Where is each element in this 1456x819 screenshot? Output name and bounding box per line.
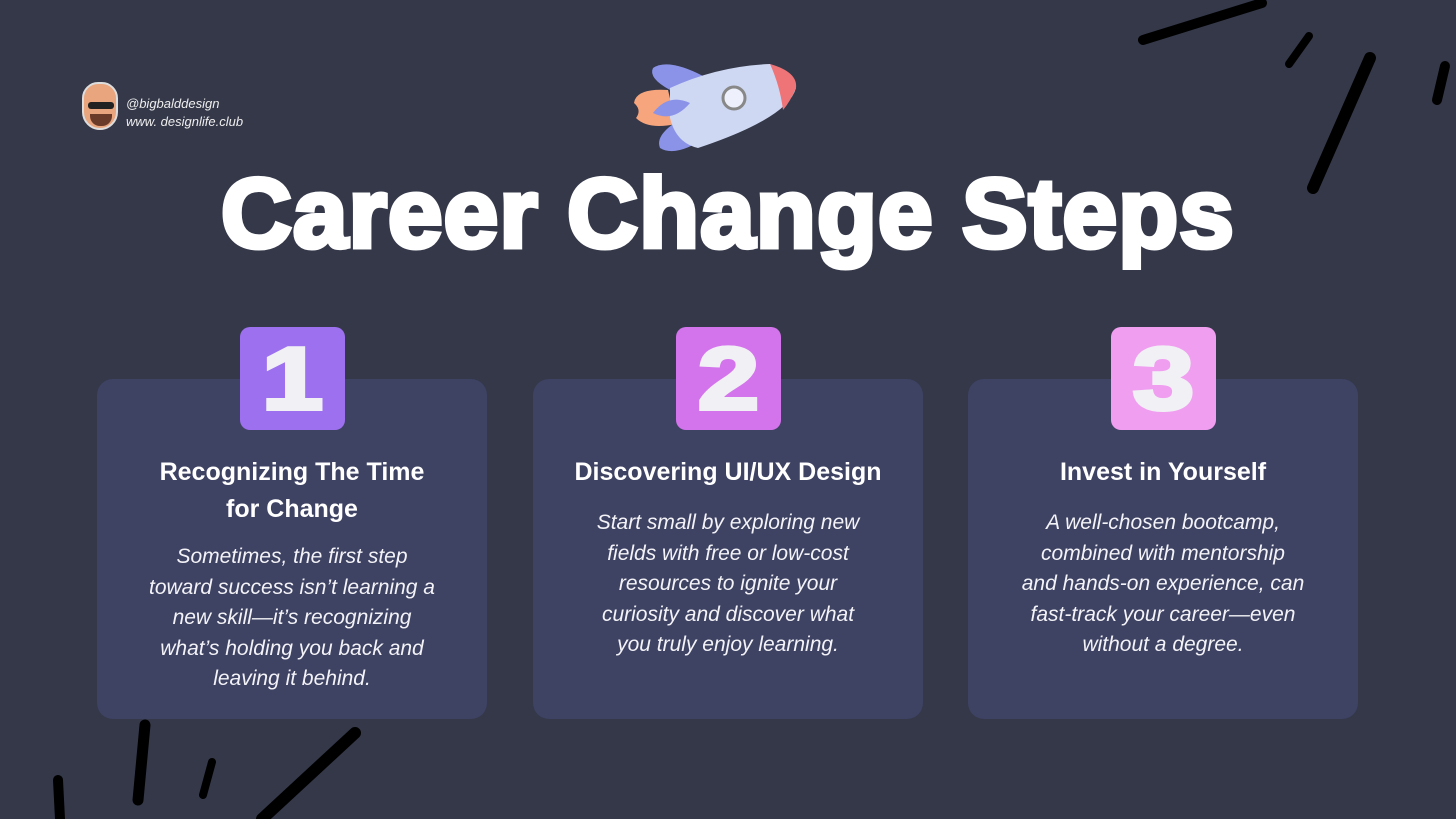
panel: step 3: A well-chosen bootcamp,: [1046, 511, 1280, 534]
panel: step 3: [968, 379, 1358, 719]
panel: step 1: toward success isn’t learning a: [149, 576, 435, 598]
icon: avatar: [82, 82, 118, 130]
title: Career Change Steps: [221, 158, 1235, 268]
panel: step 1: [97, 379, 487, 719]
badge 3: [1111, 327, 1216, 430]
panel: step 1: leaving it behind.: [213, 667, 371, 690]
badge 3: 3: [1133, 329, 1194, 428]
panel: step 3: without a degree.: [1082, 633, 1244, 656]
panel: step 1: Recognizing The Time: [160, 458, 424, 486]
badge 2: [676, 327, 781, 430]
author text: www. designlife.club: [126, 114, 243, 129]
panel: step 2: you truly enjoy learning.: [617, 633, 839, 656]
panel: step 3: combined with mentorship: [1041, 542, 1285, 564]
panel: step 1: new skill—it’s recognizing: [173, 606, 411, 629]
author text: @bigbalddesign: [126, 96, 219, 111]
panel: step 3: Invest in Yourself: [1060, 458, 1266, 486]
panel: step 2: [533, 379, 923, 719]
badge 1: [240, 327, 345, 430]
panel: step 2: Start small by exploring new: [597, 511, 859, 534]
panel: step 3: fast-track your career—even: [1031, 602, 1295, 626]
badge 2: 2: [698, 329, 759, 428]
badge 1: 1: [262, 329, 323, 428]
author text: [126, 96, 243, 129]
panel: step 1: what’s holding you back and: [160, 636, 424, 660]
panel: step 2: resources to ignite your: [619, 572, 837, 595]
panel: step 3: and hands-on experience, can: [1022, 572, 1304, 595]
panel: step 1: Sometimes, the first step: [176, 545, 408, 568]
panel: step 2: Discovering UI/UX Design: [574, 458, 882, 486]
panel: step 1: for Change: [226, 495, 358, 523]
panel: step 2: curiosity and discover what: [602, 602, 854, 626]
icon: rocket: [634, 64, 796, 152]
panel: step 2: fields with free or low-cost: [607, 542, 849, 564]
